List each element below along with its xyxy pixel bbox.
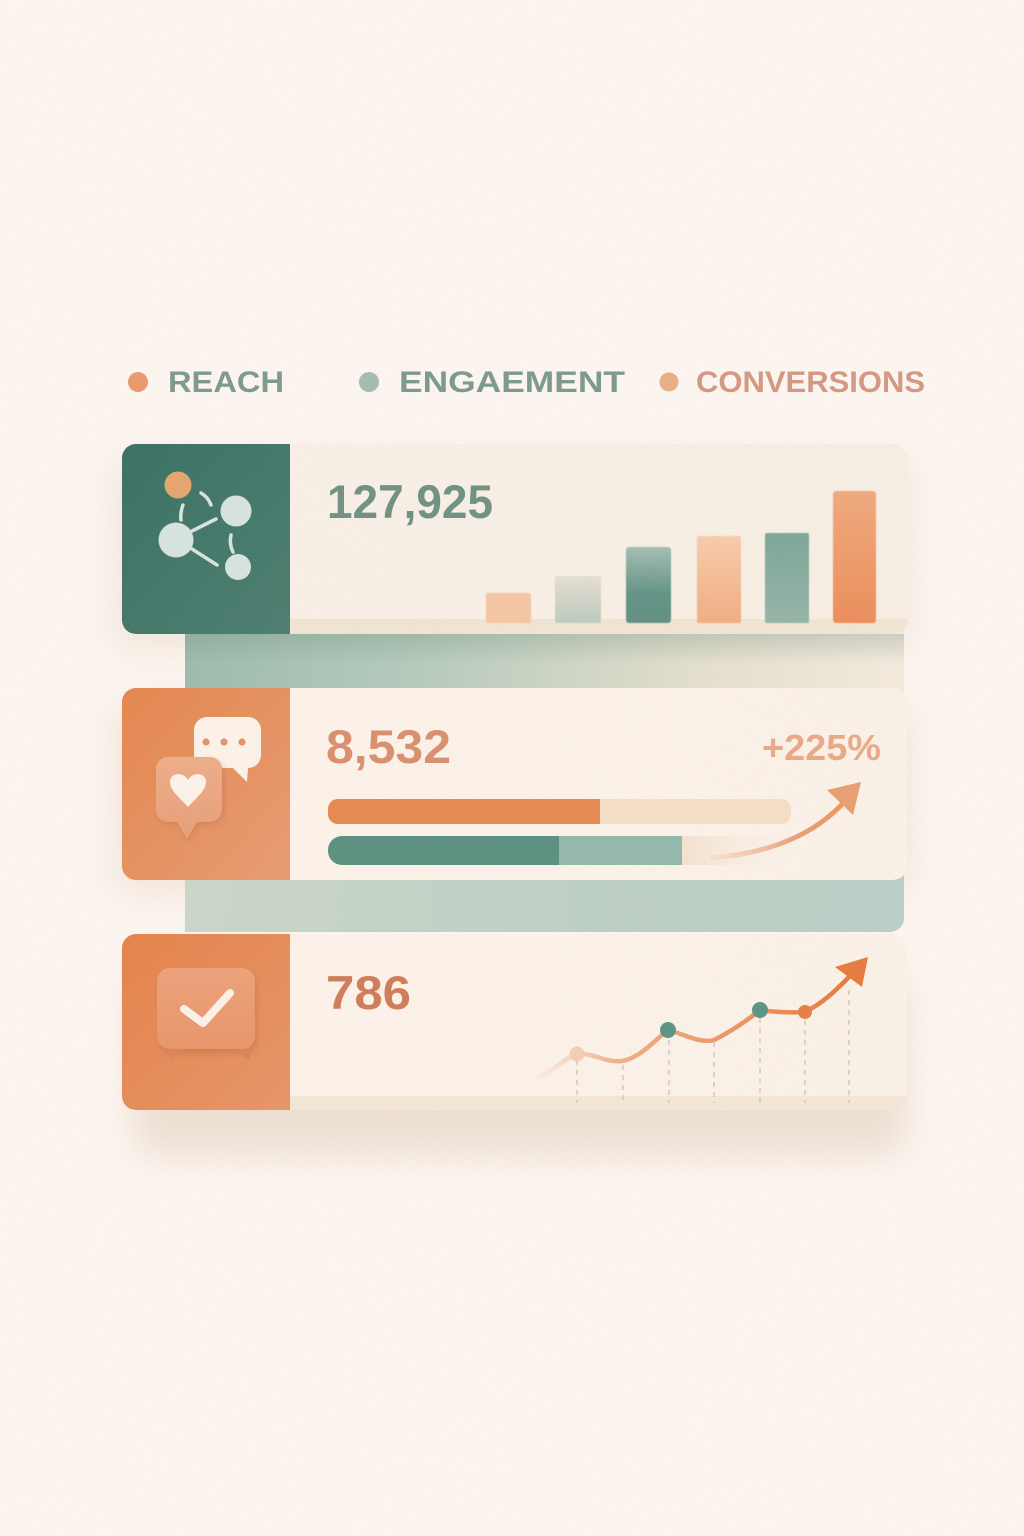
card body [122,444,907,634]
legend item: engagement: ENGAEMENT [399,366,625,399]
icon: check badge [157,968,257,1061]
icon: network [158,472,252,580]
icon panel: orange [122,688,290,880]
legend item: reach: REACH [168,366,284,399]
line chart [537,957,868,1103]
icon panel: green [122,444,290,634]
icon: chat bubbles with heart [156,717,261,842]
legend item: reach [128,366,284,399]
checkmark [184,993,230,1023]
white chat bubble [194,717,261,782]
value: +225%: +225% [762,727,881,768]
soft shadows behind cards [112,460,912,1155]
value: 786: 786 [326,966,411,1019]
data points [570,1046,584,1062]
progress bar: orange [328,799,791,824]
panel: conversions card [122,934,907,1110]
card body [122,934,907,1110]
progress bar: green [328,836,792,865]
value: 8,532: 8,532 [326,720,451,773]
growth arrow [712,782,861,858]
back panel: upper connector [185,625,904,695]
arrow head [835,957,868,987]
drop lines [577,990,849,1103]
panel: reach card [122,444,907,634]
card base strip [290,619,907,634]
legend item: conversions: CONVERSIONS [696,366,925,399]
card body [122,688,907,880]
heart [170,774,206,807]
panel: engagement card [122,688,907,880]
heart bubble [156,757,222,839]
heart bubble shadow [158,761,224,842]
back panel: lower connector [185,870,904,932]
legend [128,366,925,399]
card base strip [290,1096,907,1110]
bar chart [486,491,876,623]
icon panel: orange [122,934,290,1110]
value: 127,925: 127,925 [327,475,493,528]
trend line [537,974,852,1078]
